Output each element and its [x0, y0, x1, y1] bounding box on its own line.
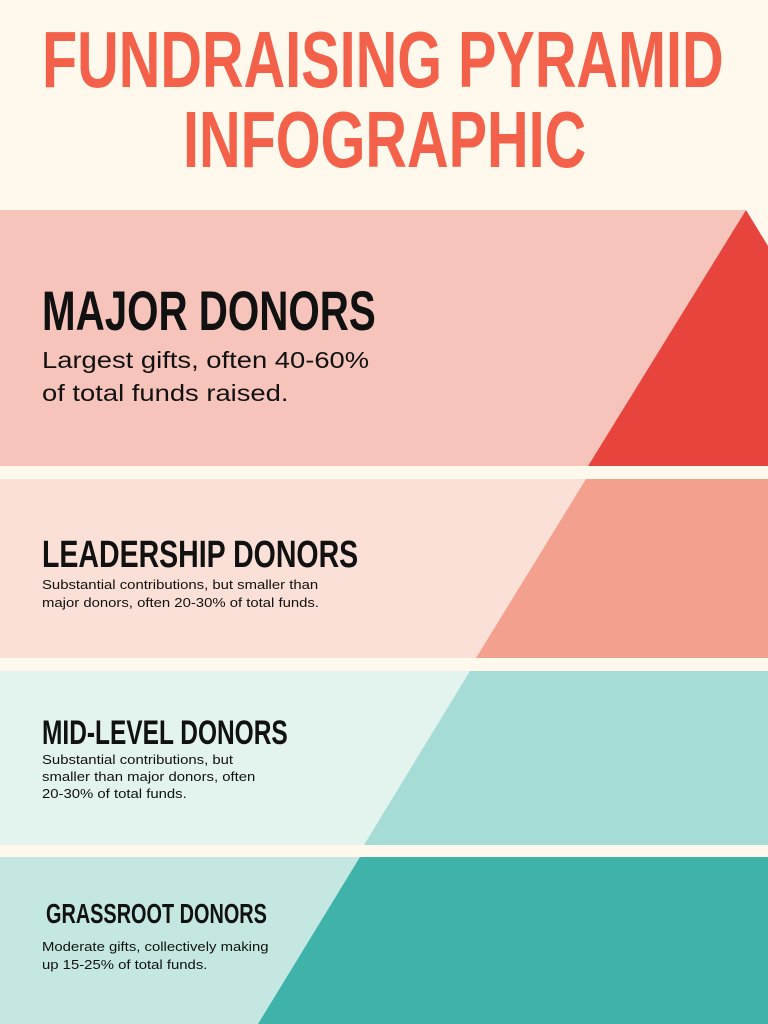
text: mid-level donors: 20-30% of total funds.: [42, 787, 187, 801]
title: INFOGRAPHIC: [183, 95, 586, 184]
text: mid-level donors: smaller than major donors, often: [42, 770, 255, 784]
title: [42, 15, 724, 184]
heading: major donors: MAJOR DONORS: [42, 279, 376, 342]
text: mid-level donors: Substantial contributions, but: [42, 753, 233, 767]
band: grassroot donors: [0, 857, 768, 1024]
text: grassroot donors: up 15-25% of total funds.: [42, 958, 207, 972]
title: FUNDRAISING PYRAMID: [42, 15, 724, 104]
text: leadership donors: Substantial contributions, but smaller than: [42, 578, 318, 592]
text: grassroot donors: [42, 940, 269, 972]
band: mid-level donors: [0, 671, 768, 845]
text: leadership donors: [42, 578, 319, 610]
text: major donors: of total funds raised.: [42, 380, 288, 406]
heading: leadership donors: LEADERSHIP DONORS: [42, 534, 358, 576]
text: mid-level donors: [42, 753, 255, 801]
band: major donors: [0, 210, 768, 466]
text: major donors: [42, 347, 369, 406]
text: grassroot donors: Moderate gifts, collectively making: [42, 940, 269, 954]
text: leadership donors: major donors, often 20-30% of total funds.: [42, 596, 319, 610]
band: leadership donors: [0, 479, 768, 658]
heading: mid-level donors: MID-LEVEL DONORS: [42, 714, 288, 752]
text: major donors: Largest gifts, often 40-60%: [42, 347, 369, 373]
heading: grassroot donors: GRASSROOT DONORS: [46, 898, 267, 929]
